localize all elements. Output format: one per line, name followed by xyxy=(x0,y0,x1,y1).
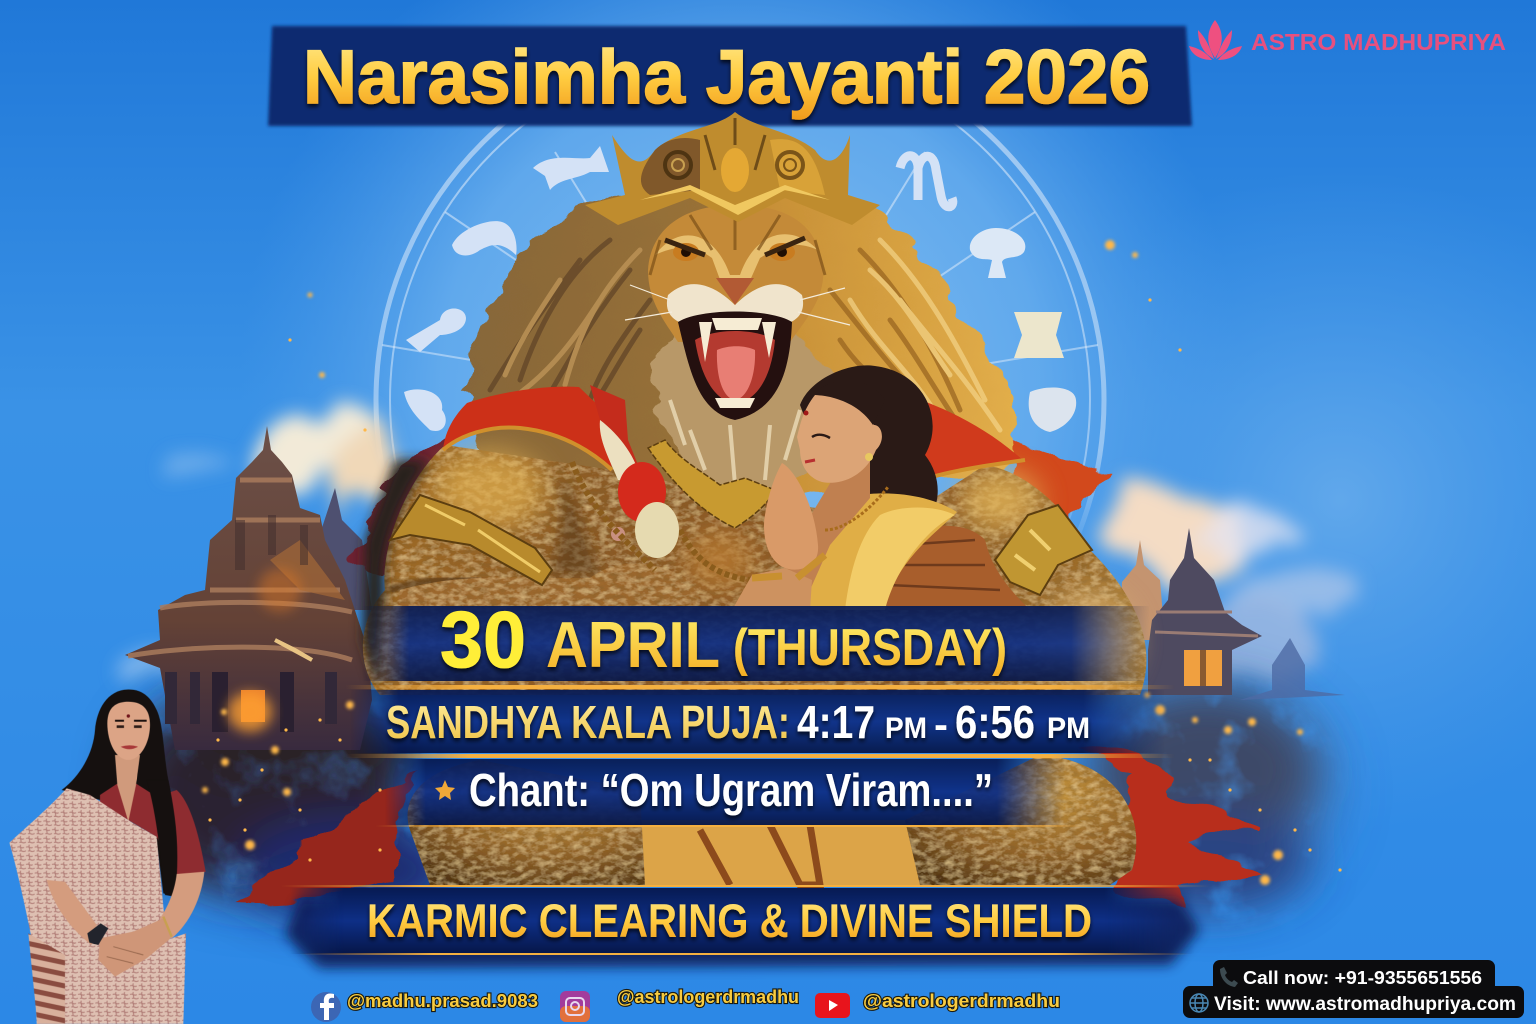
title text: Narasimha Jayanti 2026 xyxy=(303,35,1150,120)
puja start PM: PM xyxy=(885,712,927,745)
zodiac sign: libra xyxy=(452,221,517,255)
red cape behind left arm xyxy=(350,435,470,580)
saree stripes xyxy=(28,933,65,1024)
blouse xyxy=(42,784,206,882)
contact box xyxy=(1183,960,1524,1018)
lion face xyxy=(625,205,850,342)
red shawl left shoulder xyxy=(443,387,612,470)
Narasimha figure xyxy=(362,112,1146,695)
puja label: SANDHYA KALA PUJA: xyxy=(386,696,790,748)
sparkles xyxy=(202,240,1342,885)
date number: 30 xyxy=(440,595,526,684)
bottom banner xyxy=(280,885,1210,968)
zodiac sign: leo xyxy=(1029,387,1076,432)
hair xyxy=(62,689,178,897)
smoke nebula left xyxy=(130,690,460,920)
banner top line xyxy=(280,885,1210,887)
long hair front xyxy=(147,780,177,897)
clouds left xyxy=(120,410,420,674)
clouds right xyxy=(1100,495,1360,680)
logo text: ASTRO MADHUPRIYA xyxy=(1251,29,1506,55)
icon: youtube xyxy=(815,993,850,1018)
red flowing cloth right xyxy=(1080,746,1262,915)
sari xyxy=(760,493,957,610)
website text: Visit: www.astromadhupriya.com xyxy=(1214,994,1516,1015)
date panel xyxy=(365,606,1146,682)
praying hands xyxy=(764,463,818,570)
logo xyxy=(1189,20,1506,60)
right leg xyxy=(905,755,1136,885)
zodiac sign: sagittarius xyxy=(533,146,609,190)
necklace on girl xyxy=(825,487,888,530)
zodiac sign: sun xyxy=(1014,312,1064,358)
chest and neck xyxy=(772,460,870,606)
banner text: KARMIC CLEARING & DIVINE SHIELD xyxy=(367,894,1092,947)
crown xyxy=(585,112,880,225)
left forearm and fist xyxy=(395,564,700,612)
zodiac sign: cancer xyxy=(404,389,446,431)
social handles xyxy=(311,987,1060,1022)
divider gold line upper xyxy=(345,685,1175,689)
saree xyxy=(9,788,186,1024)
dhoti xyxy=(630,820,925,885)
garland xyxy=(590,385,679,558)
small distant tower xyxy=(1240,638,1345,700)
gold necklace xyxy=(648,440,775,528)
divider gold line lower xyxy=(375,825,1085,827)
haze under nebula xyxy=(135,690,1325,890)
banner bottom line xyxy=(300,953,1190,955)
hand on girl's arm xyxy=(875,526,1030,610)
arm band right xyxy=(995,505,1092,595)
zodiac sign: scorpio xyxy=(900,156,953,207)
face xyxy=(797,395,882,483)
neck and chest xyxy=(115,755,140,822)
body and arms xyxy=(362,445,1146,695)
smoke nebula right xyxy=(1095,690,1315,910)
hair xyxy=(800,365,938,525)
temple left xyxy=(125,426,372,750)
divider gold line middle xyxy=(345,754,1175,758)
phone text: Call now: +91-9355651556 xyxy=(1243,968,1482,988)
lion beard xyxy=(650,335,840,510)
zodiac sign: tree xyxy=(970,228,1025,278)
open mouth xyxy=(678,312,792,420)
red cape behind right arm xyxy=(1005,440,1108,520)
forearms and hands xyxy=(98,918,173,977)
lion mane xyxy=(462,190,1018,510)
left arm xyxy=(47,880,97,945)
left leg xyxy=(408,760,645,885)
puja time panel xyxy=(345,685,1175,753)
right arm xyxy=(160,872,204,938)
watch xyxy=(87,923,108,945)
dhoti folds xyxy=(700,825,820,885)
puja end PM: PM xyxy=(1047,712,1090,745)
date month: APRIL xyxy=(546,608,720,681)
temple right xyxy=(1120,528,1345,700)
instagram handle: @astrologerdrmadhu xyxy=(617,987,799,1007)
face xyxy=(107,702,150,760)
red shawl right shoulder xyxy=(915,398,1025,480)
puja dash: - xyxy=(934,703,948,747)
zodiac wheel xyxy=(376,36,1104,764)
girl Prahlada xyxy=(732,365,957,610)
title banner xyxy=(268,26,1192,126)
icon: lotus xyxy=(1189,20,1242,60)
temple rear dome xyxy=(1120,540,1165,640)
chant panel xyxy=(345,754,1175,827)
youtube handle: @astrologerdrmadhu xyxy=(863,991,1060,1011)
arm band left xyxy=(390,495,552,585)
icon: star xyxy=(435,780,455,800)
temple back tower xyxy=(310,488,372,610)
icon: instagram xyxy=(560,991,590,1022)
red flowing cloth left xyxy=(232,770,415,903)
icon: phone xyxy=(1220,967,1238,987)
facebook handle: @madhu.prasad.9083 xyxy=(347,991,538,1011)
date weekday: (THURSDAY) xyxy=(733,619,1007,677)
chant text: Chant: “Om Ugram Viram....” xyxy=(469,764,993,816)
presenter portrait xyxy=(9,689,206,1024)
puja end time: 6:56 xyxy=(955,696,1035,748)
icon: facebook xyxy=(311,992,341,1022)
bangle xyxy=(163,917,172,937)
beaded necklace xyxy=(572,462,750,580)
icon: globe xyxy=(1190,994,1208,1012)
zodiac sign: virgo xyxy=(406,308,466,352)
puja start time: 4:17 xyxy=(797,696,875,748)
